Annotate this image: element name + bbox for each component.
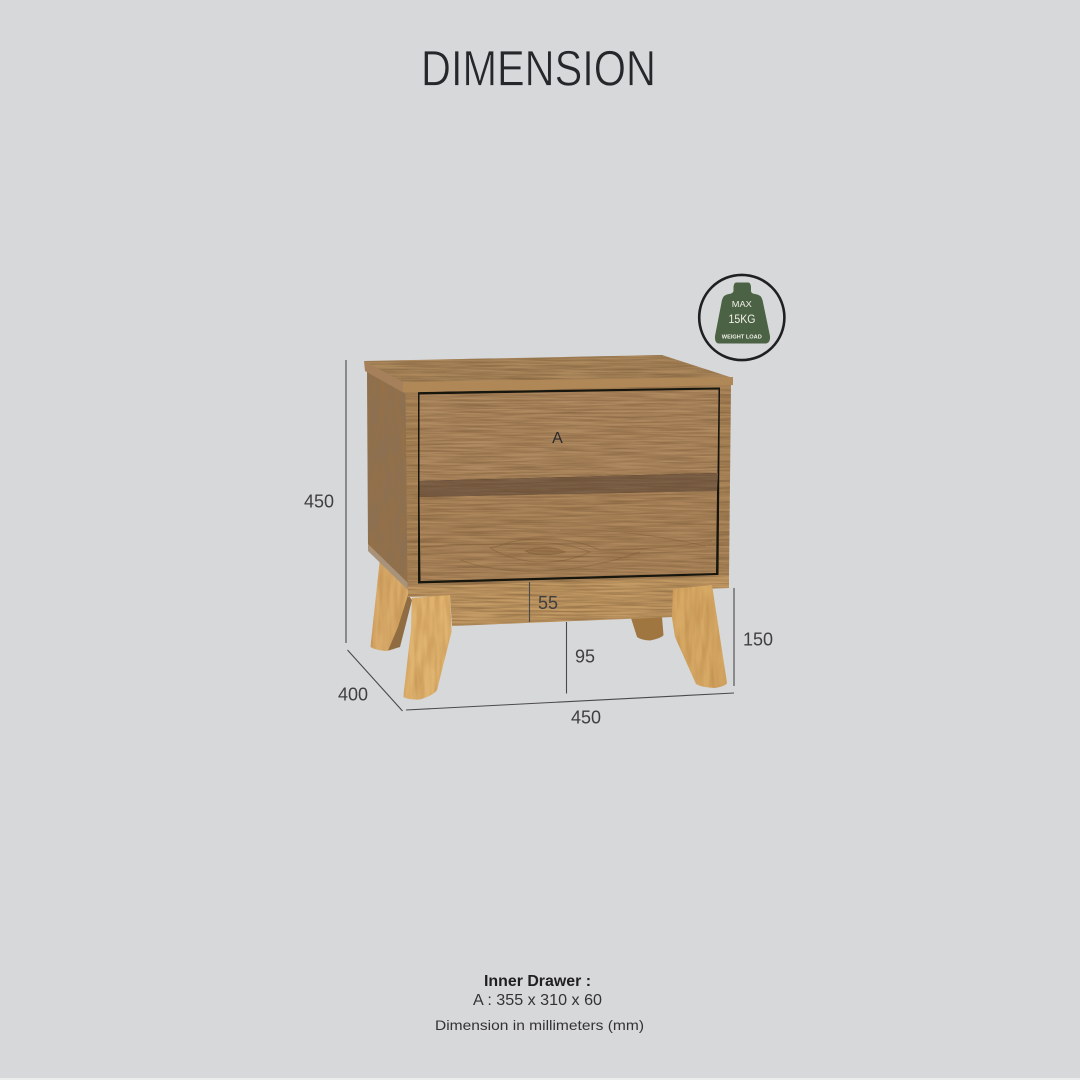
dimension: width 450 <box>406 693 734 728</box>
recessed walnut gap <box>420 473 718 497</box>
base apron <box>408 575 729 626</box>
back right leg <box>631 617 664 640</box>
footer: inner drawer heading: Inner Drawer : <box>484 973 591 990</box>
carcass front frame <box>406 384 731 587</box>
icon: max weight load badge: WEIGHT LOAD <box>722 334 762 340</box>
dimension: depth 400 <box>338 650 402 711</box>
drawer B front <box>420 491 717 581</box>
top panel front edge <box>403 377 733 392</box>
side panel lower edge <box>368 544 408 590</box>
dimension: apron 55: 55 <box>538 593 558 613</box>
top panel surface <box>364 355 733 383</box>
front right leg <box>672 585 727 688</box>
icon: max weight load badge: MAX <box>732 299 752 309</box>
dimension: depth 400: 400 <box>338 684 368 704</box>
dimension: leg height 150 <box>734 588 773 686</box>
dimension: leg height 150: 150 <box>743 630 773 650</box>
nightstand illustration <box>364 355 733 700</box>
icon: max weight load badge <box>699 275 784 360</box>
carcass side panel <box>367 372 408 586</box>
dimension: width 450: 450 <box>571 708 601 728</box>
dimension: overall height 450: 450 <box>304 492 334 512</box>
footer: unit note: Dimension in millimeters (mm) <box>435 1017 644 1033</box>
back left leg <box>370 558 412 651</box>
drawer A front <box>420 390 718 481</box>
dimension: clearance 95 <box>566 622 595 694</box>
dimension: apron 55 <box>530 582 558 622</box>
title: DIMENSION <box>421 40 656 96</box>
drawer label A: A <box>552 430 563 447</box>
drawer recess outline <box>418 388 720 584</box>
dimension: clearance 95: 95 <box>575 646 595 666</box>
top panel side edge <box>364 361 403 392</box>
footer: drawer size: A : 355 x 310 x 60 <box>473 992 602 1009</box>
front left leg <box>404 595 452 700</box>
icon: max weight load badge: 15KG <box>728 314 756 326</box>
